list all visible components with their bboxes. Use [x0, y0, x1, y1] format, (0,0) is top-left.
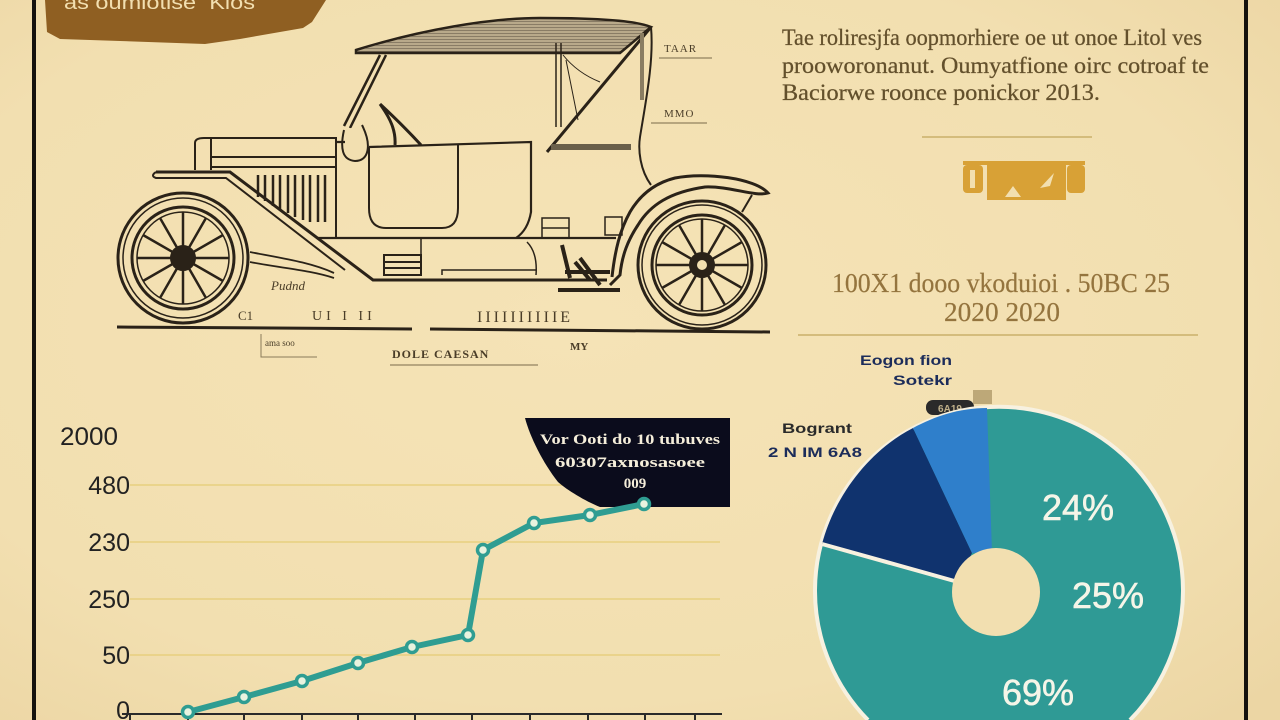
blueprint annotations: Pudnd: [270, 278, 305, 293]
y axis labels: [60, 423, 130, 720]
door: [369, 145, 458, 228]
blueprint annotations: IIIIIIIIIIE: [477, 309, 573, 326]
front wheel: [118, 193, 248, 323]
blueprint annotations: DOLE CAESAN: [392, 347, 489, 361]
pie chart labels: Bogrant: [782, 420, 852, 436]
blueprint annotations: [238, 43, 712, 365]
small tag icon: [926, 390, 992, 415]
y axis labels: 250: [88, 586, 130, 614]
donut chart: [815, 407, 1183, 720]
steering wheel: [380, 104, 421, 145]
rear pillar: [639, 27, 652, 185]
ground line: [117, 327, 770, 332]
front sill: [156, 172, 607, 280]
gridlines: [130, 485, 720, 655]
donut percentages: 25%: [1072, 575, 1144, 616]
car blueprint illustration: [117, 18, 770, 332]
grille: [258, 175, 325, 222]
body: [317, 142, 616, 238]
line chart: [60, 418, 730, 720]
pie chart labels: 2 N IM 6A8: [768, 444, 862, 460]
intro text block: Baciorwe roonce ponickor 2013.: [782, 80, 1100, 105]
y axis labels: 2000: [60, 423, 118, 451]
windshield post: [344, 55, 386, 128]
chassis mechanism: [558, 245, 620, 290]
pie chart labels: Sotekr: [893, 372, 953, 388]
x axis: [122, 714, 722, 720]
y axis labels: 50: [102, 642, 130, 670]
donut percentages: 24%: [1042, 487, 1114, 528]
blueprint annotations: MY: [570, 341, 588, 353]
gold car icon: [963, 161, 1085, 200]
blueprint annotations: UI I II: [312, 309, 376, 324]
rear wheel: [638, 201, 766, 329]
callout: 60307axnosasoee: [555, 455, 705, 471]
blueprint annotations: C1: [238, 308, 253, 323]
pie chart labels: [768, 352, 953, 460]
body upper rail hatch: [551, 144, 631, 150]
blueprint annotations: MMO: [664, 108, 695, 120]
intro text block: Tae roliresjfa oopmorhiere oe ut onoe Litol ves: [782, 25, 1202, 50]
small tag icon: 6A19: [938, 404, 962, 415]
callout: 009: [624, 476, 646, 492]
data points: [182, 498, 650, 718]
statistic text: 100X1 dooo vkoduioi . 50BC 25: [832, 268, 1170, 298]
title banner: [45, 0, 326, 44]
intro text block: [782, 25, 1209, 105]
rear roof support: [556, 43, 561, 127]
pie chart labels: Eogon fion: [860, 352, 952, 368]
y axis labels: 480: [88, 472, 130, 500]
rear fender: [610, 176, 768, 285]
data line: [188, 504, 644, 712]
statistic text: 2020 2020: [944, 297, 1060, 327]
donut percentages: 69%: [1002, 672, 1074, 713]
divider: [798, 334, 1198, 336]
statistic text: [832, 268, 1170, 327]
donut percentages: [1002, 487, 1144, 713]
front wire support: [250, 252, 334, 278]
callout: [525, 418, 730, 507]
divider: [922, 136, 1092, 138]
hood: [195, 138, 336, 238]
lower body: [421, 238, 536, 275]
blueprint annotations: ama soo: [265, 338, 295, 348]
roof: [356, 18, 651, 53]
blueprint annotations: TAAR: [664, 43, 697, 55]
y axis labels: 230: [88, 529, 130, 557]
intro text block: prooworonanut. Oumyatfione oirc cotroaf te: [782, 53, 1209, 78]
callout: Vor Ooti do 10 tubuves: [540, 432, 720, 448]
